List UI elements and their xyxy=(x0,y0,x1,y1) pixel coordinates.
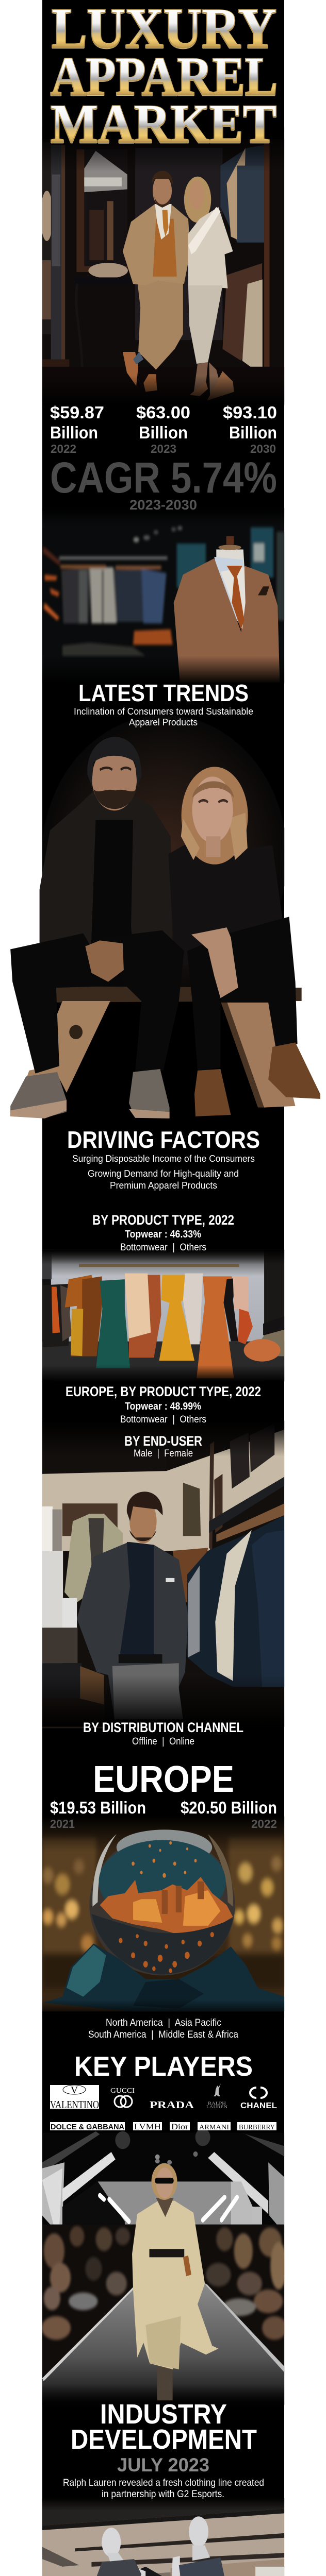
sneakers and boots xyxy=(10,1072,67,1118)
other regions: North America | Asia Pacific xyxy=(106,2018,221,2028)
segment: Europe by product type 2022: Topwear : 48.99% xyxy=(125,1401,201,1412)
trend description: Apparel Products xyxy=(129,717,198,727)
stat 2022: $59.87 xyxy=(50,403,104,422)
stat 2022: 2022 xyxy=(51,442,76,455)
title line: APPAREL: APPAREL xyxy=(51,47,278,107)
heading: driving factors: DRIVING FACTORS xyxy=(67,1126,260,1153)
second mannequin xyxy=(172,2516,224,2576)
title line: MARKET: MARKET xyxy=(51,95,276,155)
stat 2023 xyxy=(136,403,190,455)
segment: by end-user xyxy=(124,1433,202,1459)
logo: LVMH: LVMH xyxy=(134,2123,161,2131)
segment: by product type 2022: BY PRODUCT TYPE, 2022 xyxy=(92,1212,234,1228)
segment: by distribution channel: Offline | Online xyxy=(132,1736,194,1747)
segment: by product type 2022: Topwear : 46.33% xyxy=(125,1229,201,1240)
logo: Ralph Lauren xyxy=(206,2083,227,2109)
logo: Burberry: BURBERRY xyxy=(239,2124,275,2131)
other regions xyxy=(88,2018,238,2040)
page panel: black column xyxy=(42,0,284,2576)
photo: couple seated on wooden bench xyxy=(10,715,320,1118)
hands xyxy=(85,940,124,982)
logo: Gucci xyxy=(110,2087,135,2107)
value 2021: 2021 xyxy=(50,1817,75,1831)
logos row 1 xyxy=(50,2083,277,2111)
driving factors list xyxy=(72,1154,255,1191)
stat 2022 xyxy=(50,403,104,455)
title line: APPAREL: APPAREL xyxy=(51,46,278,107)
logo: Ralph Lauren: LAUREN xyxy=(206,2105,227,2109)
logo: Dolce and Gabbana: DOLCE & GABBANA xyxy=(51,2123,124,2131)
photo: crystal globe with city on fabric xyxy=(42,1817,284,2018)
stat 2030: Billion xyxy=(229,423,277,442)
photo: mannequins in fashion store xyxy=(42,2498,284,2576)
driving factors list: Surging Disposable Income of the Consumers xyxy=(72,1154,255,1164)
CAGR figure: CAGR 5.74% xyxy=(50,453,277,502)
logo: Chanel xyxy=(240,2088,277,2110)
CAGR figure: 2023-2030 xyxy=(129,497,197,513)
segment: by end-user: BY END-USER xyxy=(124,1433,202,1449)
other regions: South America | Middle East & Africa xyxy=(88,2029,238,2040)
development date: JULY 2023 xyxy=(117,2454,209,2476)
development description: in partnership with G2 Esports. xyxy=(102,2489,224,2500)
heading: key players: KEY PLAYERS xyxy=(74,2051,253,2082)
heading: industry development xyxy=(71,2399,257,2455)
stat 2023: 2023 xyxy=(151,442,176,455)
stat 2022: Billion xyxy=(50,423,98,442)
logo: Valentino: VALENTINO xyxy=(50,2098,99,2111)
photo: couple in boutique xyxy=(41,127,284,405)
photo: dresses on rack xyxy=(42,1250,284,1382)
logos row 2 xyxy=(50,2122,276,2131)
segment: by distribution channel xyxy=(83,1720,243,1747)
segment: by product type 2022 xyxy=(92,1212,234,1253)
title line: APPAREL: APPAREL xyxy=(51,46,278,106)
trend description xyxy=(74,706,253,727)
stat 2030: $93.10 xyxy=(223,403,277,422)
stat 2030: 2030 xyxy=(250,442,276,455)
development description: Ralph Lauren revealed a fresh clothing line created xyxy=(63,2478,264,2488)
Europe market values xyxy=(50,1798,277,1831)
value 2022: 2022 xyxy=(251,1817,277,1831)
segment: Europe by product type 2022: EUROPE, BY PRODUCT TYPE, 2022 xyxy=(66,1384,261,1399)
segment: Europe by product type 2022: Bottomwear | Others xyxy=(120,1414,206,1425)
logo: Armani: ARMANI xyxy=(199,2124,229,2131)
logo: Gucci: GUCCI xyxy=(110,2087,135,2095)
heading: Europe: EUROPE xyxy=(93,1759,234,1800)
trend description: Inclination of Consumers toward Sustainable xyxy=(74,706,253,717)
heading: industry development: INDUSTRY xyxy=(100,2399,227,2430)
title line: MARKET: MARKET xyxy=(51,94,276,154)
trousers xyxy=(10,917,298,1074)
heading: industry development: DEVELOPMENT xyxy=(71,2424,257,2455)
logo: Ralph Lauren: RALPH xyxy=(208,2101,226,2106)
heading: latest trends: LATEST TRENDS xyxy=(78,680,249,706)
stat 2030 xyxy=(223,403,277,455)
segment: by product type 2022: Bottomwear | Others xyxy=(120,1242,206,1253)
logo: Prada: PRADA xyxy=(150,2099,194,2111)
driving factors list: Premium Apparel Products xyxy=(110,1180,217,1191)
title line: MARKET: MARKET xyxy=(51,94,276,153)
value 2022: $20.50 Billion xyxy=(181,1798,277,1817)
segment: by distribution channel: BY DISTRIBUTION CHANNEL xyxy=(83,1720,243,1735)
value 2021: $19.53 Billion xyxy=(50,1798,146,1817)
logo: Chanel: CHANEL xyxy=(240,2102,277,2110)
segment: by end-user: Male | Female xyxy=(134,1448,193,1459)
market size stats xyxy=(50,403,277,455)
photo: mannequin in brown jacket at store xyxy=(42,508,285,684)
development description xyxy=(63,2478,264,2500)
stat 2023: $63.00 xyxy=(136,403,190,422)
segment: Europe by product type 2022 xyxy=(66,1384,261,1425)
driving factors list: Growing Demand for High-quality and xyxy=(88,1168,239,1179)
title: Luxury Apparel Market xyxy=(51,0,278,155)
photo: model on runway xyxy=(42,2128,287,2405)
logo: Valentino: V xyxy=(71,2085,78,2096)
first mannequin xyxy=(97,2528,145,2576)
value 2021 xyxy=(50,1798,146,1831)
logo: Dior: Dior xyxy=(171,2123,189,2131)
stat 2023: Billion xyxy=(139,423,188,442)
value 2022 xyxy=(181,1798,277,1831)
logo: Valentino xyxy=(50,2085,99,2111)
photo: man in suit in store xyxy=(42,1420,284,1728)
